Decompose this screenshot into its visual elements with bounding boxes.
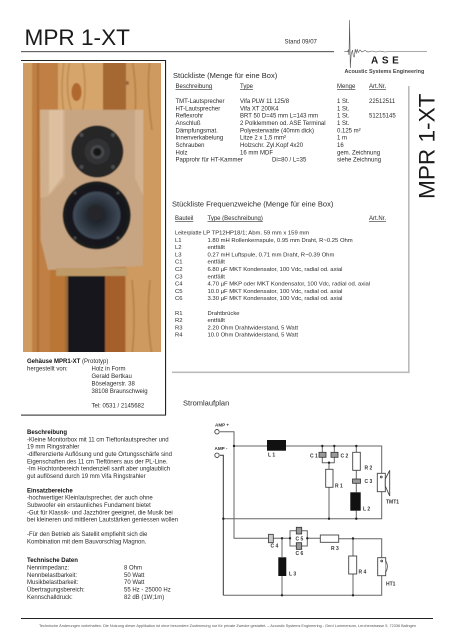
logo: ASE: ASE <box>371 56 402 66</box>
description text: Eigenschaften des 11 cm Tieftöners aus der PL-Line. <box>27 459 168 465</box>
panel: photo frame <box>21 60 166 416</box>
parts table <box>176 84 396 164</box>
technical data: 50 Watt <box>124 573 145 579</box>
parts table: Holz <box>176 150 188 156</box>
circuit diagram: R 1 <box>335 484 343 490</box>
description text: -Im Hochtonbereich tendenziell sanft aber unglaublich <box>27 467 170 473</box>
crossover table: 6.80 µF MKT Kondensator, 100 Vdc, radial od. axial <box>208 267 342 273</box>
heading: crossover parts: Stückliste Frequenzweiche (Menge für eine Box) <box>172 199 334 208</box>
heading: parts list: Stückliste (Menge für eine Box) <box>173 71 278 80</box>
parts table: 16 mm MDF <box>240 150 273 156</box>
crossover table: C5 <box>175 289 183 295</box>
parts table: Innenverkabelung <box>176 136 223 142</box>
crossover table: entfällt <box>208 260 225 266</box>
parts table: 1 St. <box>337 106 350 112</box>
speakers <box>377 473 385 492</box>
circuit diagram: TMT1 <box>386 500 399 506</box>
circuit diagram: HT1 <box>386 582 396 588</box>
parts table: Polyesterwatte (40mm dick) <box>240 128 314 134</box>
inductors <box>267 440 286 451</box>
circuit diagram: R 2 <box>364 466 372 472</box>
description text: -hochwertiger Kleinlautsprecher, der auch ohne <box>27 496 153 502</box>
technical data: Nennimpedanz: <box>27 566 69 572</box>
crossover table: C1 <box>175 260 183 266</box>
description text: gut auflösend durch 19 mm Vifa Ringstrahler <box>27 474 146 480</box>
circuit diagram: C 1 <box>310 454 318 460</box>
parts table: 1 St. <box>337 114 350 120</box>
crossover table: C3 <box>175 274 183 280</box>
logo: ASE: Acoustic Systems Engineering <box>344 69 424 75</box>
parts table: gem. Zeichnung <box>337 150 380 156</box>
parts table: 2 Polklemmen od. ASE Terminal <box>240 121 326 127</box>
parts table: Vifa PLW 11 125/8 <box>240 99 290 105</box>
crossover table: Bauteil <box>175 216 193 222</box>
circuit diagram: C 6 <box>296 551 304 557</box>
parts table: Anschluß <box>176 121 201 127</box>
parts table: TMT-Lautsprecher <box>176 99 225 105</box>
circuit diagram: L 2 <box>363 506 370 512</box>
description text: -Für den Betrieb als Satellit empfiehlt sich die <box>27 532 148 538</box>
crossover table <box>175 216 386 339</box>
parts table: 0.125 m² <box>337 128 361 134</box>
circuit diagram <box>214 422 399 596</box>
crossover table: 0.27 mH Luftspule, 0.71 mm Draht, R~0.39 Ohm <box>208 252 334 258</box>
housing credits: 38108 Braunschweig <box>92 389 148 395</box>
resistors <box>326 469 333 487</box>
parts table: Beschreibung <box>176 84 212 90</box>
technical data: Nennbelastbarkeit: <box>27 573 77 579</box>
crossover table: R4 <box>175 333 183 339</box>
crossover table: L1 <box>175 238 182 244</box>
parts table: 22512511 <box>369 99 396 105</box>
heading: circuit diagram: Stromlaufplan <box>183 398 229 408</box>
technical data: Kennschalldruck: <box>27 595 73 601</box>
crossover table: C6 <box>175 296 183 302</box>
technical data <box>27 558 171 601</box>
nodes <box>222 445 357 596</box>
housing credits: hergestellt von: <box>27 366 68 372</box>
parts table: 1 St. <box>337 99 350 105</box>
circuit diagram: R 3 <box>331 546 339 552</box>
crossover table: entfällt <box>208 318 225 324</box>
title: MPR 1-XT <box>24 25 130 50</box>
panel: parts list frame <box>172 86 410 373</box>
housing credits: Tel: 0531 / 2145682 <box>92 404 145 410</box>
description text <box>27 430 178 546</box>
parts table: Litze 2 x 1,5 mm² <box>240 136 286 142</box>
parts table: HT-Lautsprecher <box>176 106 220 112</box>
woofer <box>63 181 131 249</box>
rotated title: MPR 1-XT <box>414 93 440 199</box>
speaker cabinet <box>40 110 143 270</box>
crossover table: LP TP12HP18/1; Abm. 59 mm x 159 mm <box>203 230 309 236</box>
technical data: Musikbelastbarkeit: <box>27 580 79 586</box>
parts table: siehe Zeichnung <box>337 158 381 164</box>
crossover table: Leiterplatte <box>175 230 202 236</box>
footer note: Technische Änderungen vorbehalten. Die Nutzung dieser Applikation ist ohne besondere Zustimmung nur für private Zwecke gestattet. – Acoustic Systems Engineering - Gerd Lommersum, Lerchenstrasse 9, 72336 Balingen <box>39 624 416 628</box>
crossover table: L3 <box>175 252 182 258</box>
component labels: L 1 <box>268 452 275 458</box>
crossover table: L2 <box>175 245 182 251</box>
technical data: 8 Ohm <box>124 566 142 572</box>
parts table: Schrauben <box>176 143 205 149</box>
description text: -Gut für Klassik- und Jazzhörer geeignet, die Musik bei <box>27 510 173 516</box>
parts table: Type <box>240 84 254 90</box>
parts table: 16 <box>337 143 344 149</box>
crossover table: Drahtbrücke <box>208 311 240 317</box>
description text: Subwoofer ein erstaunliches Fundament bietet <box>27 503 151 509</box>
parts table: Papprohr für HT-Kammer <box>176 158 243 164</box>
crossover table: 3.30 µF MKT Kondensator, 100 Vdc, radial od. axial <box>208 296 342 302</box>
description text: Beschreibung <box>27 430 67 436</box>
crossover table: 10.0 Ohm Drahtwiderstand, 5 Watt <box>208 333 298 339</box>
circuit diagram: AMP - <box>214 446 228 451</box>
circuit diagram: R 4 <box>358 570 366 576</box>
footer rule <box>21 618 433 619</box>
housing credits: Böselagerstr. 38 <box>92 382 136 388</box>
crossover table: 1.80 mH Rollenkernspule, 0.95 mm Draht, R~0.25 Ohm <box>208 238 353 244</box>
circuit diagram: L 3 <box>289 572 296 578</box>
housing credits: Holz in Form <box>92 366 126 372</box>
crossover table: 4.70 µF MKP oder MKT Kondensator, 100 Vdc, radial od. axial <box>208 282 370 288</box>
crossover table: Type (Beschreibung) <box>208 216 263 222</box>
technical data: Übertragungsbereich: <box>27 586 85 594</box>
parts table: Holzschr. Zyl.Kopf 4x20 <box>240 143 304 149</box>
crossover table: 2.20 Ohm Drahtwiderstand, 5 Watt <box>208 325 298 331</box>
crossover table: C2 <box>175 267 183 273</box>
parts table: Vifa XT 200K4 <box>240 106 279 112</box>
description text: -Kleine Monitorbox mit 11 cm Tieftonlautsprecher und <box>27 438 169 444</box>
terminals <box>215 430 219 434</box>
technical data: 55 Hz - 25000 Hz <box>124 588 171 594</box>
capacitors <box>319 452 326 457</box>
technical data: 70 Watt <box>124 580 145 586</box>
parts table: Dämpfungsmat. <box>176 128 218 134</box>
crossover table: 10.0 µF MKT Kondensator, 100 Vdc, radial od. axial <box>208 289 342 295</box>
parts table: 51215145 <box>369 114 396 120</box>
header rule <box>21 51 334 52</box>
crossover table: R1 <box>175 311 183 317</box>
technical data: Technische Daten <box>27 558 78 564</box>
technical data: 82 dB (1W;1m) <box>124 595 164 601</box>
crossover table: entfällt <box>208 274 225 280</box>
parts table: 1 St. <box>337 121 350 127</box>
crossover table: C4 <box>175 282 183 288</box>
housing credits <box>27 359 148 410</box>
description text: -differenzierte Auflösung und gute Ortungsschärfe sind <box>27 452 172 458</box>
circuit diagram: AMP + <box>215 422 229 428</box>
description text: Einsatzbereiche <box>27 488 73 494</box>
crossover table: R2 <box>175 318 183 324</box>
description text: 19 mm Ringstrahler <box>27 444 79 450</box>
tweeter <box>71 126 123 178</box>
photo: speaker on stand <box>23 63 161 352</box>
housing credits: Gerald Bertkau <box>92 374 132 380</box>
parts table: Art.Nr. <box>369 84 386 90</box>
housing credits: Gehäuse MPR1-XT (Prototyp) <box>27 359 108 365</box>
parts table: Menge <box>337 84 356 90</box>
circuit diagram: C 2 <box>340 454 348 460</box>
crossover table: Art.Nr. <box>369 216 386 222</box>
crossover table: R3 <box>175 325 183 331</box>
parts table: BRT 50 D=45 mm L=143 mm <box>240 114 318 120</box>
tweeter and woofer wiring <box>220 432 382 595</box>
parts table: 1 m <box>337 136 347 142</box>
circuit diagram: C 4 <box>270 544 278 550</box>
parts table: Di=80 / L=35 <box>272 158 307 164</box>
date stamp: Stand 09/07 <box>284 40 318 46</box>
crossover table: entfällt <box>208 245 225 251</box>
description text: Kombination mit dem Bauvorschlag Magnon. <box>27 540 147 546</box>
parts table: Reflexrohr <box>176 114 203 120</box>
description text: bei kleineren und mittleren Lautstärken geniessen wollen <box>27 518 178 524</box>
logo: ASE <box>344 20 427 75</box>
circuit diagram: C 3 <box>364 479 372 485</box>
circuit diagram: C 5 <box>296 536 304 542</box>
